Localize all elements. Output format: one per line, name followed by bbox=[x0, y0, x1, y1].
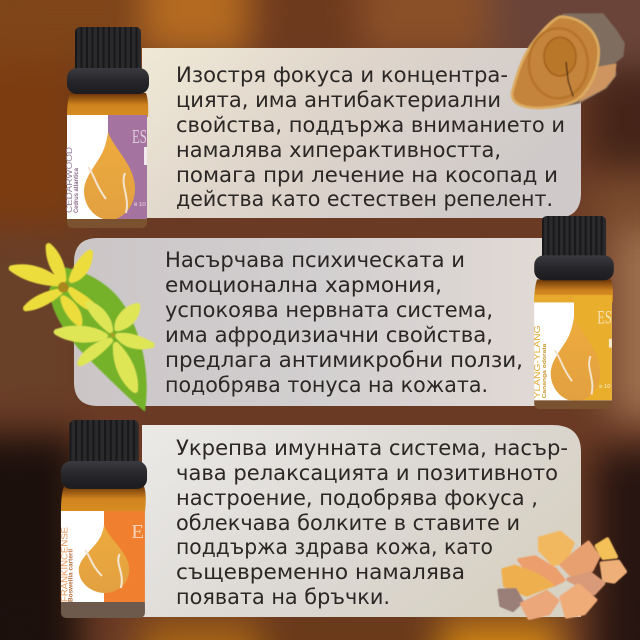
panel 2 text: успокоява нервната система, bbox=[165, 298, 493, 322]
cut face bbox=[512, 17, 599, 108]
panel 1 text: цията, има антибактериални bbox=[176, 88, 501, 112]
lower flower bbox=[57, 304, 152, 390]
bottle: frankincense bbox=[59, 420, 147, 618]
label text: frankincense: E bbox=[131, 521, 144, 543]
bottle: ylang-ylang bbox=[533, 216, 619, 409]
panel 2 background bbox=[74, 238, 562, 406]
green leaf bbox=[49, 267, 147, 412]
panel 3 text: появата на бръчки. bbox=[176, 585, 390, 609]
label text: frankincense: Boswellia carterii bbox=[67, 549, 75, 602]
label text: ylang-ylang bbox=[533, 325, 548, 398]
panel 1 text: действа като естествен репелент. bbox=[176, 187, 553, 211]
panel: ylang-ylang description bbox=[74, 238, 562, 406]
icon: frankincense resin bbox=[499, 533, 625, 618]
label text: cedarwood bbox=[64, 147, 80, 213]
panel 3 text: облекчава болките в ставите и bbox=[176, 511, 520, 535]
bottle: cedarwood: ESS bbox=[132, 126, 154, 148]
panel 3 text: настроение, подобрява фокуса , bbox=[176, 486, 538, 510]
panel 2 text bbox=[165, 248, 523, 397]
panel 1 text: Изостря фокуса и концентра- bbox=[176, 63, 508, 87]
panel 1 background bbox=[142, 48, 581, 218]
bottle: ylang-ylang: e 10 bbox=[599, 384, 611, 390]
bottle: ylang-ylang: ESS bbox=[597, 308, 619, 328]
label text: frankincense: FRANKINCENSE bbox=[59, 527, 69, 602]
label text: cedarwood: CEDARWOOD bbox=[64, 147, 74, 213]
panel 2 text: подобрява тонуса на кожата. bbox=[165, 373, 488, 397]
icon: ylang-ylang flowers and leaf bbox=[12, 246, 152, 412]
panel 3 text bbox=[176, 436, 568, 609]
panel 3 text: същевременно намалява bbox=[176, 560, 465, 584]
bottle: cedarwood bbox=[64, 27, 154, 228]
bark bbox=[540, 13, 625, 108]
panel: cedarwood description bbox=[142, 48, 581, 218]
upper flower bbox=[12, 246, 97, 323]
label text: ylang-ylang: YLANG-YLANG bbox=[533, 325, 542, 398]
panel 1 text: свойства, поддържа вниманието и bbox=[176, 113, 565, 137]
panel 2 text: предлага антимикробни ползи, bbox=[165, 348, 523, 372]
panel 2 text: емоционална хармония, bbox=[165, 273, 442, 297]
panel 3 text: поддържа здрава кожа, като bbox=[176, 535, 493, 559]
panel: frankincense description bbox=[142, 425, 581, 617]
panel 3 text: чава релаксацията и позитивното bbox=[176, 461, 558, 485]
drop on frankincense label bbox=[79, 525, 129, 593]
panel 3 text: Укрепва имунната система, насър- bbox=[176, 436, 568, 460]
panel 3 background bbox=[142, 425, 581, 617]
bottle: cedarwood: e 10 bbox=[134, 202, 146, 208]
label text: cedarwood: Cedrus atlantica bbox=[74, 167, 80, 213]
label text: frankincense bbox=[59, 521, 144, 602]
icon: cedar wood log bbox=[512, 13, 625, 108]
panel 1 text bbox=[176, 63, 565, 211]
panel 2 text: Насърчава психическата и bbox=[165, 248, 465, 272]
panel 2 text: има афродизиачни свойства, bbox=[165, 323, 493, 347]
panel 1 text: намалява хиперактивността, bbox=[176, 138, 501, 162]
label text: ylang-ylang: Cananga odorata bbox=[542, 343, 548, 398]
panel 1 text: помага при лечение на косопад и bbox=[176, 163, 558, 187]
